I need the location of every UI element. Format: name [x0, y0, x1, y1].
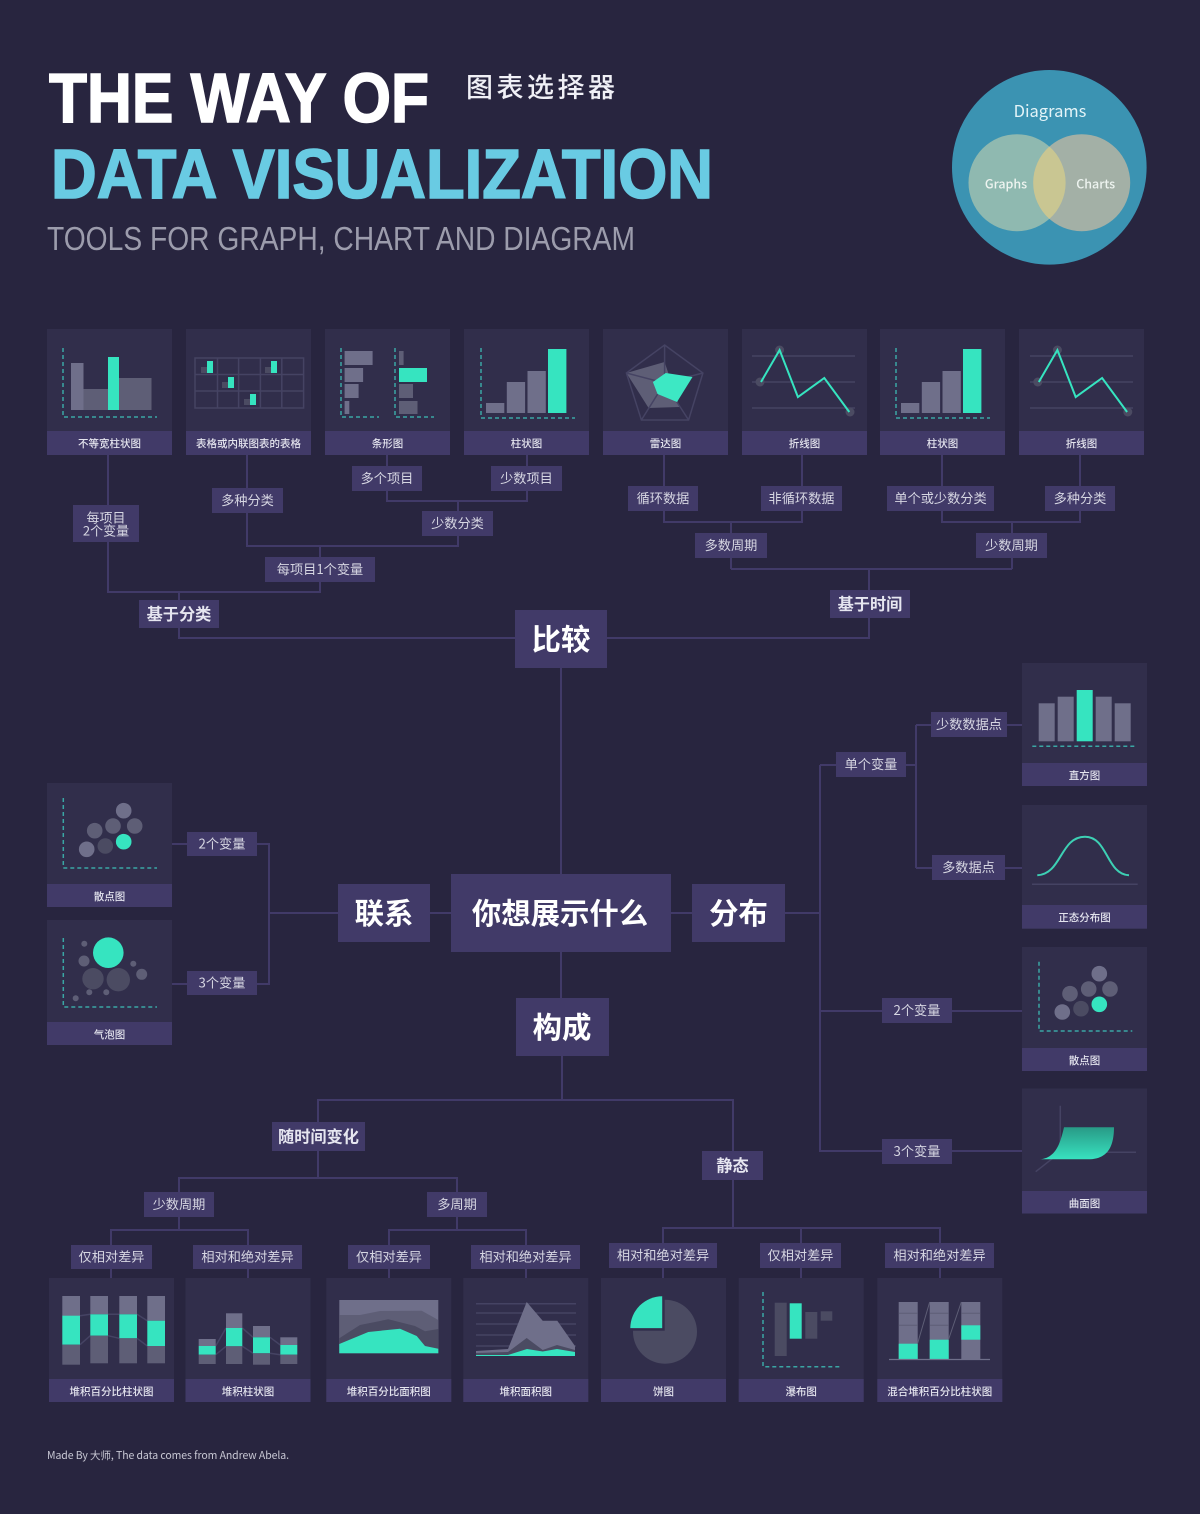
card: column chart 2 [880, 329, 1005, 455]
heading: comparison [515, 610, 607, 668]
node: per item one variable: 每项目1个变量 [277, 559, 363, 578]
venn diagram: Diagrams [1014, 98, 1087, 122]
card: waterfall chart [739, 1278, 864, 1402]
node: cyclic data [628, 486, 698, 511]
card: pie chart [601, 1278, 726, 1402]
node: category based: 基于分类 [147, 601, 211, 625]
node: many data points: 多数据点 [942, 857, 995, 876]
title: data visualization: DATA VISUALIZATION [51, 135, 713, 213]
node: few periods bottom [144, 1192, 214, 1217]
card: stacked percent area [326, 1278, 451, 1402]
node: few items: 少数项目 [500, 468, 553, 487]
node: few periods [976, 533, 1047, 558]
node: three variables right: 3个变量 [894, 1141, 940, 1160]
card: column chart [464, 329, 589, 455]
card: stacked column: 堆积柱状图 [222, 1384, 274, 1399]
node: single variable [836, 752, 906, 777]
node: few categories [422, 511, 493, 536]
heading: composition: 构成 [533, 1005, 591, 1047]
node: single or few categories [887, 486, 994, 511]
connector lines [108, 455, 1080, 1278]
card: stacked percent area: 堆积百分比面积图 [347, 1384, 431, 1399]
node: relative and absolute 4: 相对和绝对差异 [893, 1245, 986, 1264]
venn diagram [952, 70, 1147, 265]
card: radar chart [603, 329, 728, 455]
card: line chart: 折线图 [789, 436, 820, 451]
node: relative only 3: 仅相对差异 [768, 1245, 833, 1264]
node: per item one variable [265, 557, 375, 582]
card: bar chart: 条形图 [372, 436, 403, 451]
node: relative only 1: 仅相对差异 [79, 1247, 144, 1266]
node: many periods [695, 533, 767, 558]
node: relative and absolute 1 [193, 1245, 302, 1269]
subtitle: TOOLS FOR GRAPH, CHART AND DIAGRAM [47, 220, 635, 257]
node: time based: 基于时间 [838, 591, 902, 615]
node: non-cyclic data: 非循环数据 [769, 488, 834, 507]
node: two variables left: 2个变量 [199, 834, 245, 853]
node: static [702, 1151, 763, 1180]
node: many periods bottom [427, 1192, 487, 1217]
card: line chart 2 [1019, 329, 1144, 455]
node: two variables left [187, 832, 257, 856]
node: many data points [932, 855, 1005, 880]
node: cyclic data: 循环数据 [637, 488, 689, 507]
node: per item two variables [73, 505, 139, 542]
node: relative and absolute 1: 相对和绝对差异 [201, 1247, 294, 1266]
card: waterfall chart: 瀑布图 [785, 1384, 817, 1399]
heading: relationship: 联系 [355, 891, 413, 933]
card: scatter plot left: 散点图 [94, 889, 125, 904]
node: many categories: 多种分类 [221, 490, 274, 509]
card: table with embedded charts [186, 329, 311, 455]
node: many categories right [1045, 486, 1115, 511]
card: stacked column [186, 1278, 310, 1402]
card: line chart [742, 329, 867, 455]
node: few periods bottom: 少数周期 [153, 1194, 205, 1213]
card: surface chart [1022, 1088, 1147, 1214]
node: three variables right [882, 1139, 952, 1164]
node: two variables right [882, 998, 952, 1023]
footer credit: Made By 大师, The data comes from Andrew Abela. [47, 1448, 289, 1463]
card: column chart 2: 柱状图 [927, 436, 958, 451]
node: relative only 2 [348, 1245, 430, 1269]
node: relative only 3 [760, 1243, 841, 1268]
heading: distribution [692, 884, 785, 942]
card: pie chart: 饼图 [653, 1384, 674, 1399]
card: stacked area: 堆积面积图 [500, 1384, 552, 1399]
card: stacked percent column [49, 1278, 174, 1402]
node: non-cyclic data [761, 486, 842, 511]
venn diagram: Graphs [985, 174, 1027, 192]
title: the way of: THE WAY OF [49, 59, 429, 137]
node: relative and absolute 3: 相对和绝对差异 [617, 1245, 709, 1264]
heading: what to show: 你想展示什么 [472, 891, 648, 933]
node: category based [139, 600, 219, 628]
heading: comparison: 比较 [532, 617, 590, 659]
card: scatter plot left [47, 783, 172, 907]
node: relative and absolute 3 [609, 1243, 717, 1268]
node: many categories [212, 488, 283, 513]
heading: distribution: 分布 [709, 891, 768, 933]
node: many items [352, 466, 422, 491]
card: radar chart: 雷达图 [650, 436, 681, 451]
card: histogram [1022, 663, 1147, 786]
card: stacked area [463, 1278, 588, 1402]
node: few periods: 少数周期 [985, 535, 1038, 554]
card: bubble chart [47, 920, 172, 1045]
card: line chart 2: 折线图 [1066, 436, 1097, 451]
node: per item two variables: 2个变量 [83, 521, 129, 540]
card: scatter plot right [1022, 947, 1147, 1071]
node: few data points [931, 712, 1007, 737]
node: change over time: 随时间变化 [278, 1124, 359, 1148]
card: normal distribution: 正态分布图 [1058, 910, 1111, 925]
node: relative only 1 [71, 1245, 152, 1269]
node: few categories: 少数分类 [431, 513, 484, 532]
node: relative and absolute 4 [885, 1243, 994, 1268]
node: static: 静态 [716, 1152, 749, 1176]
node: two variables right: 2个变量 [894, 1000, 940, 1019]
card: normal distribution [1022, 805, 1147, 929]
heading: composition [516, 998, 609, 1056]
node: relative only 2: 仅相对差异 [356, 1247, 422, 1266]
heading: what to show [451, 874, 671, 952]
node: many items: 多个项目 [361, 468, 413, 487]
node: time based [830, 590, 910, 618]
card: mixed stacked percent column [877, 1278, 1002, 1402]
card: histogram: 直方图 [1069, 768, 1100, 783]
node: per item two variables: 每项目 [86, 508, 126, 527]
node: single or few categories: 单个或少数分类 [894, 488, 987, 507]
title: chinese subtitle: 图表选择器 [466, 66, 615, 105]
card: mixed stacked percent column: 混合堆积百分比柱状图 [887, 1384, 992, 1399]
node: many categories right: 多种分类 [1054, 488, 1106, 507]
node: few data points: 少数数据点 [936, 714, 1002, 733]
card: stacked percent column: 堆积百分比柱状图 [70, 1384, 154, 1399]
card: column chart: 柱状图 [511, 436, 542, 451]
card: bubble chart: 气泡图 [94, 1027, 125, 1042]
card: unequal width column chart: 不等宽柱状图 [78, 436, 141, 451]
heading: relationship [338, 884, 430, 942]
node: relative and absolute 2 [471, 1245, 580, 1269]
card: unequal width column chart [47, 329, 172, 455]
node: few items [491, 466, 562, 491]
node: many periods: 多数周期 [705, 535, 757, 554]
node: three variables left: 3个变量 [199, 973, 245, 992]
card: scatter plot right: 散点图 [1069, 1053, 1100, 1068]
node: relative and absolute 2: 相对和绝对差异 [479, 1247, 572, 1266]
node: three variables left [187, 971, 257, 995]
card: bar chart [325, 329, 450, 455]
node: single variable: 单个变量 [845, 754, 897, 773]
node: many periods bottom: 多周期 [437, 1194, 477, 1213]
card: table with embedded charts: 表格或内联图表的表格 [196, 436, 301, 451]
card: surface chart: 曲面图 [1069, 1196, 1100, 1211]
venn diagram: Charts [1076, 174, 1115, 192]
